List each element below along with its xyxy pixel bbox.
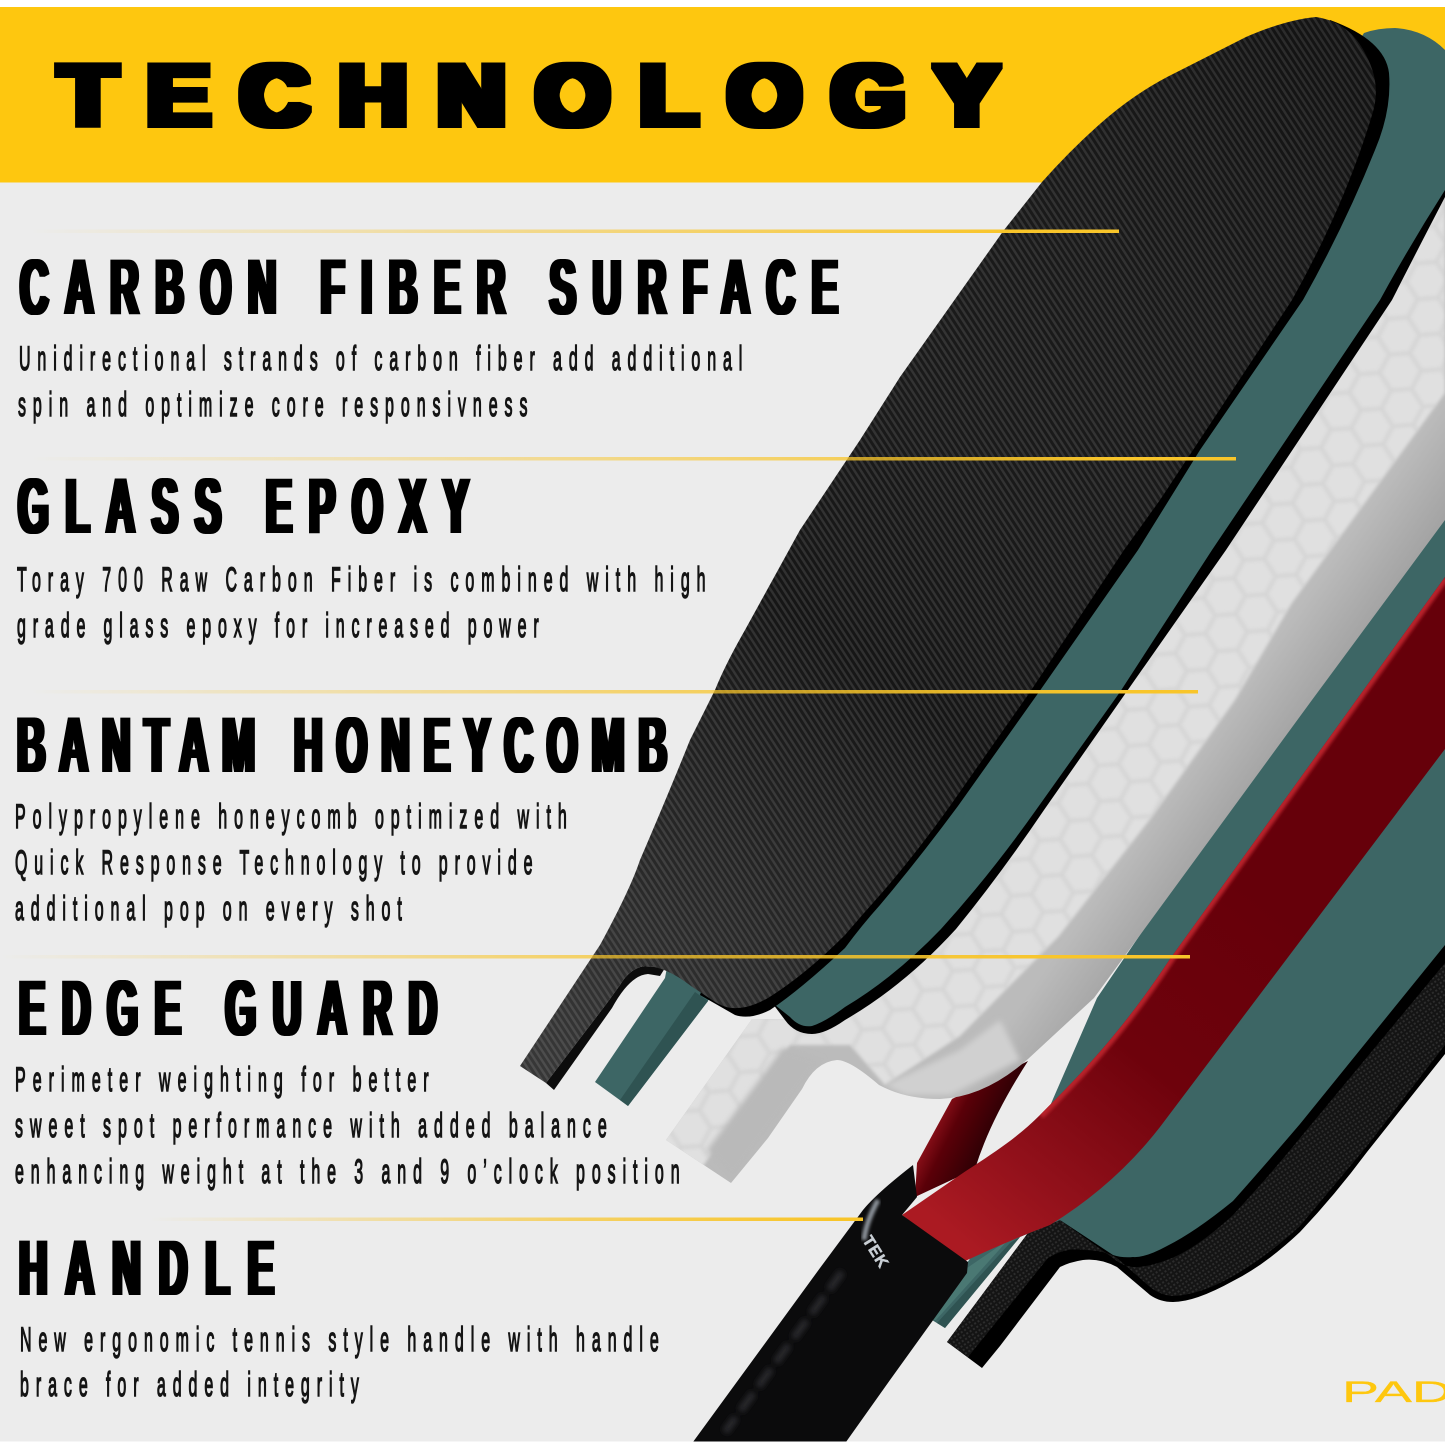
- section: edge guard: [15, 964, 680, 1191]
- body: glass epoxy: [17, 560, 706, 645]
- heading: handle: HANDLE: [19, 1224, 274, 1313]
- handle brand text: TEK: [859, 1233, 892, 1272]
- layer: red edge guard: [902, 577, 1445, 1262]
- body: bantam honeycomb: Polypropylene honeycomb optimized with: [15, 797, 567, 836]
- body: bantam honeycomb: [15, 797, 567, 928]
- layer: front teal glass epoxy: [595, 28, 1445, 1106]
- section: glass epoxy: [17, 462, 706, 645]
- section: handle: [19, 1224, 659, 1404]
- title: technology: TECHNOLOGY: [59, 48, 998, 144]
- section: carbon fiber surface: [18, 243, 838, 424]
- section: bantam honeycomb: [15, 701, 667, 928]
- layer: back carbon face: [947, 900, 1445, 1368]
- body: edge guard: [15, 1060, 680, 1191]
- body: handle: brace for added integrity: [20, 1365, 359, 1404]
- leader line: honeycomb: [30, 690, 1198, 694]
- bottom white edge: [0, 1442, 1445, 1445]
- leader line: edge guard: [0, 955, 1190, 958]
- layer: back teal face and tab: [932, 500, 1445, 1328]
- layer: white honeycomb core: [655, 180, 1445, 1183]
- body: carbon fiber surface: Unidirectional strands of carbon fiber add additional: [19, 339, 742, 378]
- leader line: glass epoxy: [30, 457, 1236, 460]
- body: handle: New ergonomic tennis style handle with handle: [20, 1320, 659, 1359]
- body: carbon fiber surface: spin and optimize core responsivness: [18, 385, 527, 424]
- body: carbon fiber surface: [18, 339, 742, 424]
- paddle exploded layers: [520, 17, 1445, 1442]
- body: edge guard: Perimeter weighting for better: [15, 1060, 429, 1099]
- body: edge guard: sweet spot performance with added balance: [15, 1106, 607, 1145]
- body: bantam honeycomb: additional pop on every shot: [15, 889, 402, 928]
- layer: front carbon fiber surface: [520, 17, 1389, 1090]
- body: edge guard: enhancing weight at the 3 and 9 o’clock position: [15, 1152, 680, 1191]
- body: glass epoxy: Toray 700 Raw Carbon Fiber is combined with high: [17, 560, 706, 599]
- heading: carbon fiber surface: CARBON FIBER SURFACE: [20, 243, 838, 332]
- body: glass epoxy: grade glass epoxy for increased power: [17, 606, 539, 645]
- body: bantam honeycomb: Quick Response Technology to provide: [15, 843, 532, 882]
- heading: edge guard: EDGE GUARD: [19, 964, 437, 1053]
- heading: bantam honeycomb: BANTAM HONEYCOMB: [17, 701, 667, 790]
- leader line: handle: [150, 1218, 863, 1221]
- yellow title banner: [0, 7, 1445, 182]
- heading: glass epoxy: GLASS EPOXY: [18, 462, 469, 551]
- handle with grip: [693, 1165, 968, 1442]
- leader line: carbon fiber: [30, 230, 1119, 233]
- body: handle: [20, 1320, 659, 1404]
